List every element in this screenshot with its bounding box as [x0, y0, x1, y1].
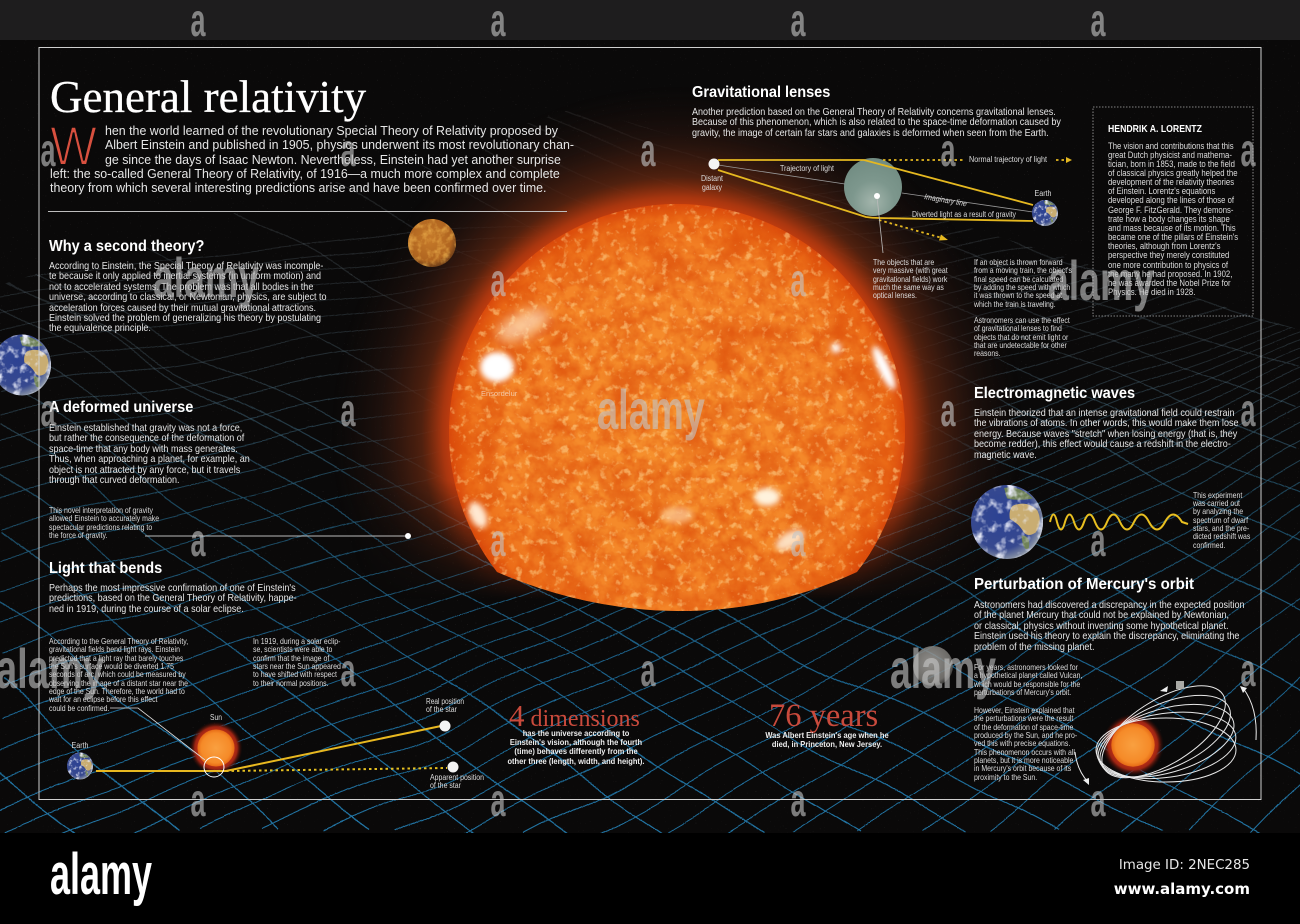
top band: [0, 0, 1300, 40]
panel text: George F. FitzGerald. They demons-: [1108, 205, 1233, 215]
heading: light that bends: Light that bends: [49, 560, 162, 577]
note: Vulcan: which would be responsible for the: [974, 679, 1080, 689]
diagram labels: of the star: [426, 705, 457, 714]
text: light that bends: predictions, based on the General Theory of Relativity, happe-: [49, 592, 297, 604]
note: dwarf star experiment: confirmed.: [1193, 540, 1225, 550]
small watermark letters: a: [790, 774, 806, 826]
note: 1919 eclipse: to their normal positions.: [253, 678, 328, 688]
note: 1919 eclipse: confirm that the image of: [253, 653, 329, 663]
introduction text continued: theory from which several interesting predictions arise and have been confirmed over time.: [50, 180, 546, 195]
sun: [445, 200, 910, 615]
diagram: Mercury orbit: [1075, 668, 1256, 796]
text: a deformed universe: [49, 422, 250, 486]
text: Mercury's orbit: or classical, physics without inventing some hypothetical planet.: [974, 620, 1228, 632]
lens labels: Earth: [1034, 189, 1052, 198]
introduction text continued: left: the so-called General Theory of Relativity, of 1916—a much more complex and complete: [50, 166, 560, 181]
note: novel interpretation: This novel interpretation of gravity: [49, 505, 153, 515]
planet: Mercury: [913, 646, 953, 686]
lens mass: [844, 158, 902, 216]
lens labels: [701, 155, 1052, 219]
note: moving train: by adding the speed with which: [974, 282, 1070, 292]
contact circle: [204, 757, 224, 777]
note: massive objects: very massive (with great: [873, 265, 948, 275]
panel text: [1108, 140, 1238, 297]
text: a deformed universe: object is not attracted by any force, but it travels: [49, 464, 240, 476]
note: dwarf star experiment: [1193, 490, 1250, 550]
note: 1919 eclipse: to have shifted with respect: [253, 669, 337, 679]
small watermark letters: a: [640, 644, 656, 696]
text: why a second theory: the equivalence principle.: [49, 322, 151, 334]
icon: earth: [971, 485, 1043, 559]
note: astronomers: objects that do not emit light or: [974, 332, 1068, 342]
note: astronomers: of gravitational lenses to find: [974, 323, 1062, 333]
icon: earth: [1032, 200, 1058, 226]
note: massive objects: much the same way as: [873, 282, 944, 292]
note: Vulcan: For years, astronomers looked for: [974, 662, 1078, 672]
text: why a second theory: not to accelerated systems. The problem was that all bodies in the: [49, 281, 313, 293]
note: dwarf star experiment: dicted redshift was: [1193, 531, 1250, 541]
panel text: he was awarded the Nobel Prize for: [1108, 278, 1231, 288]
large watermark words: alamy: [890, 637, 996, 700]
heading: Mercury's orbit: Perturbation of Mercury's orbit: [974, 576, 1194, 593]
note: moving train: from a moving train, the object's: [974, 265, 1072, 275]
note: Vulcan: a hypothetical planet called Vulcan,: [974, 670, 1082, 680]
note: bending of rays: predicted that a light ray that barely touches: [49, 653, 183, 663]
text: electromagnetic waves: magnetic wave.: [974, 449, 1037, 461]
panel: Hendrik A. Lorentz: [1108, 124, 1238, 297]
divider under introduction: [48, 211, 567, 212]
stat: 76 years: 76 years: [769, 698, 878, 734]
panel text: theories, although from Lorentz's: [1108, 241, 1220, 251]
heading: electromagnetic waves: Electromagnetic waves: [974, 385, 1135, 402]
large watermark words: alamy: [597, 378, 705, 441]
diagram labels: Sun: [210, 713, 222, 722]
panel text: the many he had proposed. In 1902,: [1108, 269, 1232, 279]
small watermark letters: a: [940, 384, 956, 436]
planet: Earth at left edge: [0, 334, 51, 396]
small watermark letters: a: [790, 514, 806, 566]
stat text: 4 dimensions: other three (length, width, and height).: [507, 756, 645, 766]
note: bending of rays: [49, 636, 188, 713]
panel text: of Einstein. Lorentz's equations: [1108, 186, 1215, 196]
planet: Venus: [408, 219, 456, 267]
panel text: of classical physics greatly helped the: [1108, 168, 1238, 178]
icon: central sun: [1102, 714, 1164, 776]
small watermark letters: a: [40, 384, 56, 436]
small watermark letters: a: [1240, 384, 1256, 436]
note: astronomers: Astronomers can use the effect: [974, 315, 1070, 325]
title: General relativity: [50, 72, 366, 122]
diagram labels: of the star: [430, 781, 461, 790]
text: a deformed universe: Thus, when approaching a planet, for example, an: [49, 453, 250, 465]
note: bending of rays: wait for an eclipse before this effect: [49, 694, 157, 704]
note: novel interpretation: [49, 505, 159, 540]
stat text: 76 years: Was Albert Einstein's age when he: [765, 730, 889, 740]
small watermark letters: a: [340, 644, 356, 696]
panel text: great Dutch physicist and mathema-: [1108, 150, 1232, 160]
text: a deformed universe: but rather the consequence of the deformation of: [49, 432, 244, 444]
introduction text: hen the world learned of the revolutionary Special Theory of Relativity proposed by: [105, 123, 558, 138]
imaginary line: [718, 165, 1033, 212]
light wave: [1050, 514, 1188, 530]
small watermark letters: a: [1240, 124, 1256, 176]
note: Einstein's explanation: proximity to the Sun.: [974, 772, 1037, 782]
panel text: Physics. He died in 1928.: [1108, 287, 1195, 297]
light rays: [718, 160, 1033, 221]
lens labels: Imaginary line: [924, 192, 968, 209]
text: Mercury's orbit: problem of the missing planet.: [974, 641, 1094, 653]
text: why a second theory: [49, 260, 327, 334]
text: light that bends: Perhaps the most impressive confirmation of one of Einstein's: [49, 582, 296, 594]
icon: small earth: [67, 752, 93, 780]
small watermark letters: a: [790, 254, 806, 306]
text: gravitational lenses: [692, 106, 1061, 139]
small watermark letters: a: [490, 514, 506, 566]
panel text: became one of the pillars of Einstein's: [1108, 232, 1238, 242]
note: bending of rays: the Sun's surface would be diverted 1.75: [49, 661, 174, 671]
lens labels: Normal trajectory of light: [969, 155, 1048, 164]
stat: 4 dimensions: 4 dimensions: [509, 698, 640, 733]
large watermark words: alamy: [153, 246, 259, 309]
note: bending of rays: could be confirmed.: [49, 703, 109, 713]
small watermark letters: a: [340, 384, 356, 436]
text: light that bends: ned in 1919, during the course of a solar eclipse.: [49, 603, 244, 615]
small watermark letters: a: [1090, 774, 1106, 826]
note: 1919 eclipse: se, scientists were able to: [253, 644, 332, 654]
lens labels: Diverted light as a result of gravity: [912, 210, 1016, 219]
dashed continuation rays: [879, 160, 1066, 238]
footer url: www.alamy.com: [1114, 880, 1250, 898]
note: 1919 eclipse: stars near the Sun appeared: [253, 661, 341, 671]
note: novel interpretation: the force of gravity.: [49, 530, 107, 540]
stat text: 76 years: died, in Princeton, New Jersey.: [772, 739, 882, 749]
diagram labels: [72, 697, 484, 790]
footer image id: Image ID: 2NEC285: [1119, 858, 1250, 873]
text: Mercury's orbit: of the planet Mercury that could not be explained by Newtonian,: [974, 609, 1229, 621]
text: electromagnetic waves: [974, 407, 1239, 461]
diagram: gravitational lens: [701, 155, 1072, 253]
heading: why a second theory: Why a second theory?: [49, 238, 204, 255]
small watermark letters: a: [940, 124, 956, 176]
note: massive objects: optical lenses.: [873, 290, 917, 300]
note: Vulcan: perturbations of Mercury's orbit.: [974, 687, 1071, 697]
small watermark letters: a: [1090, 514, 1106, 566]
text: why a second theory: Einstein solved the problem of generalizing his theory by postulating: [49, 312, 321, 324]
note: bending of rays: observing the image of a distant star near the: [49, 678, 188, 688]
note: moving train: [974, 257, 1072, 309]
text: Mercury's orbit: Einstein used his theory to explain the discrepancy, eliminating the: [974, 630, 1239, 642]
text: gravitational lenses: Because of this phenomenon, which is also related to the space-time deformation caused by: [692, 116, 1061, 128]
panel text: and mass because of its motion. This: [1108, 223, 1236, 233]
panel text: developed along the lines of those of: [1108, 195, 1234, 205]
text: Mercury's orbit: [974, 599, 1245, 653]
small watermark letters: a: [190, 514, 206, 566]
small watermark letters: a: [1240, 644, 1256, 696]
panel heading: HENDRIK A. LORENTZ: [1108, 124, 1202, 135]
page frame: [39, 48, 1261, 800]
distant galaxy marker: [708, 158, 720, 170]
diagram labels: Real position: [426, 697, 464, 706]
panel text: perspective they merely constituted: [1108, 250, 1229, 260]
precessing orbits: [1087, 668, 1242, 796]
lens labels: Trajectory of light: [780, 164, 835, 173]
panel text: tician, born in 1853, made to the field: [1108, 159, 1235, 169]
introduction text: [105, 123, 574, 167]
note: moving train: it was thrown to the speed at: [974, 290, 1062, 300]
note: 1919 eclipse: In 1919, during a solar eclip-: [253, 636, 340, 646]
note: Einstein's explanation: However, Einstein explained that: [974, 705, 1075, 715]
note: bending of rays: seconds of arc, which could be measured by: [49, 669, 186, 679]
heading: a deformed universe: A deformed universe: [49, 399, 193, 416]
note: novel interpretation: allowed Einstein to accurately make: [49, 513, 159, 523]
note: massive objects: [873, 257, 948, 300]
note: Einstein's explanation: in Mercury's orbit because of its: [974, 763, 1071, 773]
leader from lens centre: [874, 193, 883, 253]
panel text: trate how a body changes its shape: [1108, 214, 1230, 224]
note: moving train: If an object is thrown forward: [974, 257, 1063, 267]
text: why a second theory: acceleration forces caused by their mutual gravitational attractions.: [49, 302, 316, 314]
heading: gravitational lenses: Gravitational lenses: [692, 84, 830, 101]
note: Vulcan: [974, 662, 1082, 697]
stat text: 76 years: [765, 730, 889, 749]
small watermark letters: a: [640, 124, 656, 176]
introduction text: ge since the days of Isaac Newton. Nevertheless, Einstein had yet another surprise: [105, 152, 561, 167]
note: dwarf star experiment: This experiment: [1193, 490, 1242, 500]
text: why a second theory: According to Einstein, the Special Theory of Relativity was incomple-: [49, 260, 323, 272]
apparent light path: [226, 768, 447, 771]
note: bending of rays: According to the General Theory of Relativity,: [49, 636, 188, 646]
text: why a second theory: universe, according to classical, or Newtonian, physics, are subject to: [49, 291, 327, 303]
diagram labels: Apparent position: [430, 773, 484, 782]
text: gravitational lenses: gravity, the image of certain far stars and galaxies is deformed when seen from the Earth.: [692, 127, 1049, 139]
note: massive objects: gravitational fields) work: [873, 274, 947, 284]
large watermark words: [0, 246, 1154, 700]
note: bending of rays: gravitational fields bend light rays. Einstein: [49, 644, 180, 654]
small watermark letters: a: [490, 774, 506, 826]
text: gravitational lenses: Another prediction based on the General Theory of Relativity concerns gravitational lenses.: [692, 106, 1056, 118]
faint sun label: Ensordelur: [481, 389, 518, 398]
text: a deformed universe: space-time that any body with mass generates.: [49, 443, 238, 455]
text: why a second theory: te because it only applied to inertial systems (in uniform motion) and: [49, 270, 321, 282]
leader line: [110, 708, 205, 760]
text: Mercury's orbit: Astronomers had discovered a discrepancy in the expected position: [974, 599, 1245, 611]
icon: Mercury: [1176, 681, 1184, 689]
diagram: redshift wave: [971, 485, 1188, 559]
footer logo: alamy: [50, 842, 152, 907]
note: Einstein's explanation: ved this with precise equations.: [974, 738, 1070, 748]
large watermark words: alamy: [0, 637, 104, 700]
small watermark letters: a: [190, 774, 206, 826]
diagram: light bending near the sun: [67, 697, 484, 790]
arrow heads: [939, 157, 1072, 240]
note: novel interpretation: spectacular predictions relating to: [49, 522, 152, 532]
sun glow: [343, 114, 1011, 594]
note: dwarf star experiment: by analyzing the: [1193, 506, 1243, 516]
note: Einstein's explanation: planets, but it is more noticeable: [974, 755, 1073, 765]
panel text: one more contribution to physics of: [1108, 260, 1228, 270]
rotation arrows: [1075, 688, 1256, 782]
note: astronomers: reasons.: [974, 348, 1001, 358]
note: Einstein's explanation: This phenomenon occurs with all: [974, 747, 1075, 757]
stat text: 4 dimensions: has the universe according to: [523, 728, 629, 738]
stat text: 4 dimensions: Einstein's vision, although the fourth: [510, 737, 642, 747]
text: electromagnetic waves: Einstein theorized that an intense gravitational field could restrain: [974, 407, 1235, 419]
note: moving train: which the train is traveling.: [974, 299, 1056, 309]
note: Einstein's explanation: produced by the Sun, and he pro-: [974, 730, 1077, 740]
star markers: [440, 720, 458, 772]
small watermark letters: a: [40, 124, 56, 176]
text: electromagnetic waves: the vibrations of atoms. In other words, this would make them lose: [974, 417, 1239, 429]
small watermark letters: a: [490, 254, 506, 306]
text: a deformed universe: through that curved deformation.: [49, 474, 180, 486]
arrow heads: [1083, 686, 1247, 785]
real light path: [96, 726, 441, 771]
diagram labels: Earth: [72, 741, 88, 750]
text: light that bends: [49, 582, 297, 615]
note: Einstein's explanation: of the deformation of space-time: [974, 722, 1073, 732]
callout line to sun: [145, 533, 411, 539]
panel text: The vision and contributions that this: [1108, 140, 1234, 150]
note: bending of rays: edge of the Sun. Therefore, the world had to: [49, 686, 185, 696]
text: electromagnetic waves: energy. Because waves "stretch" when losing energy (that is, they: [974, 428, 1237, 440]
note: astronomers: that are undetectable for other: [974, 340, 1067, 350]
note: dwarf star experiment: was carried out: [1193, 498, 1240, 508]
Lorentz box border: [1093, 107, 1253, 316]
lens labels: galaxy: [702, 183, 722, 192]
panel text: development of the relativity theories: [1108, 177, 1234, 187]
text: electromagnetic waves: become redder), this effect would cause a redshift in the electro-: [974, 438, 1231, 450]
drop cap: W: [50, 114, 97, 177]
lens labels: Distant: [701, 174, 724, 183]
introduction text: Albert Einstein and published in 1905, physics underwent its most revolutionary chan-: [105, 137, 574, 152]
stat text: 4 dimensions: [507, 728, 645, 766]
note: massive objects: The objects that are: [873, 257, 934, 267]
note: Einstein's explanation: the perturbations were the result: [974, 713, 1073, 723]
large watermark words: alamy: [1048, 249, 1154, 312]
text: a deformed universe: Einstein established that gravity was not a force,: [49, 422, 242, 434]
note: 1919 eclipse: [253, 636, 341, 688]
small watermark letters: a: [340, 124, 356, 176]
note: moving train: final speed can be calculated: [974, 274, 1063, 284]
introduction text continued: [50, 166, 560, 195]
icon: small sun: [190, 722, 242, 774]
stat text: 4 dimensions: (time) behaves differently from the: [514, 746, 638, 756]
note: dwarf star experiment: stars, and the pre-: [1193, 523, 1249, 533]
note: astronomers: [974, 315, 1070, 358]
note: Einstein's explanation: [974, 705, 1077, 782]
note: dwarf star experiment: spectrum of dwarf: [1193, 515, 1248, 525]
